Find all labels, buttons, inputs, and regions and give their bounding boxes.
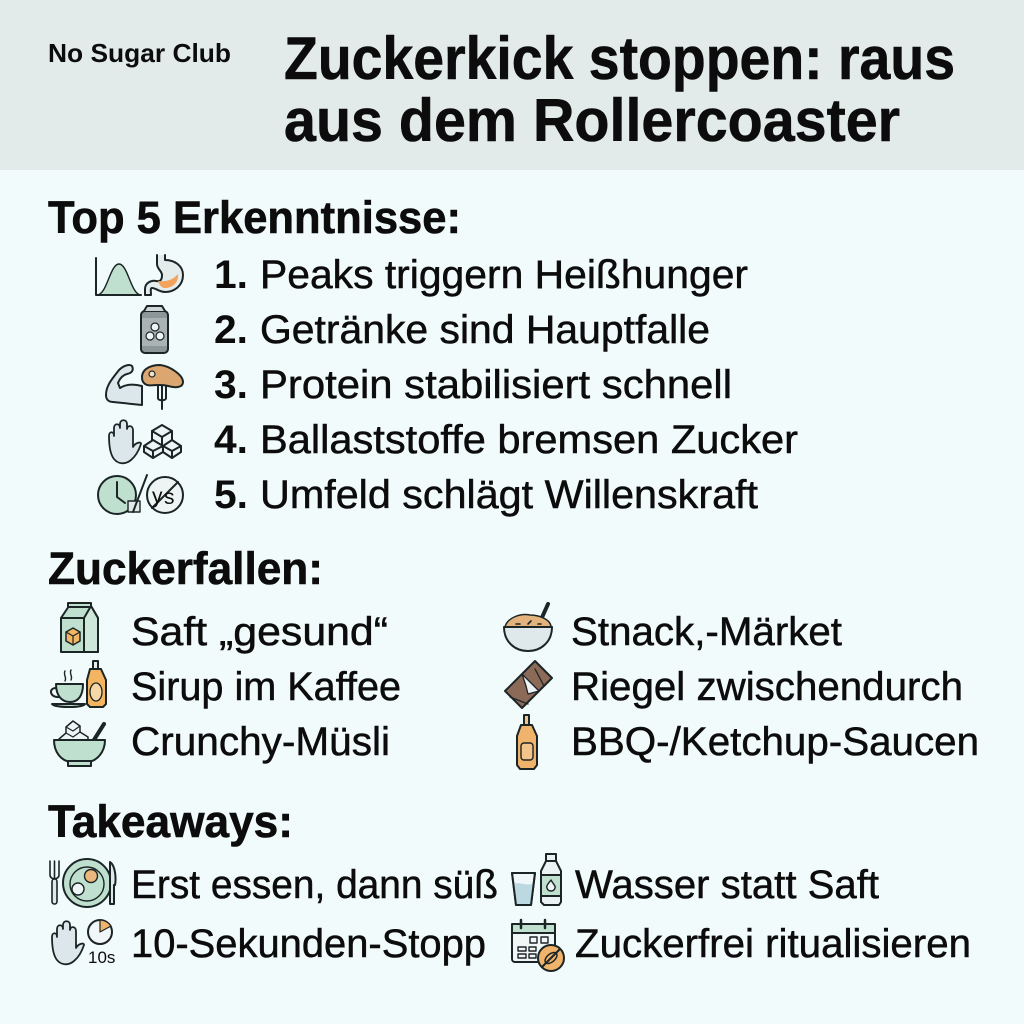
list: takeaways: Erst essen, dann süß xyxy=(131,863,498,907)
icon: flexed arm xyxy=(106,365,142,405)
list: insights: 2. xyxy=(214,308,248,352)
heading: Takeaways: Takeaways: xyxy=(48,796,293,847)
list: traps: Saft „gesund“ xyxy=(131,610,388,654)
icon: timer 10s xyxy=(88,920,115,967)
list: traps: Crunchy-Müsli xyxy=(131,720,390,764)
icon: crossed-out sweetener: s xyxy=(164,486,174,509)
icon: juice carton xyxy=(61,603,98,652)
icon: stomach xyxy=(145,255,183,295)
icon: water bottle xyxy=(541,854,561,905)
icon: plate with food xyxy=(63,859,111,907)
icon: timer 10s: 10s xyxy=(88,948,115,967)
icon: calendar xyxy=(512,920,555,962)
list: insights: Getränke sind Hauptfalle xyxy=(260,308,710,352)
list: traps xyxy=(131,610,979,764)
icon: clock xyxy=(98,476,140,514)
list: insights: 1. xyxy=(214,253,248,297)
icon: stop hand 10s xyxy=(52,921,84,964)
list: insights: Ballaststoffe bremsen Zucker xyxy=(260,418,798,462)
list: traps: Riegel zwischendurch xyxy=(571,665,963,709)
list: insights xyxy=(214,253,798,517)
icon: sauce bottle xyxy=(517,715,537,769)
icon: chocolate bar xyxy=(505,661,552,708)
icon: fork xyxy=(50,861,59,904)
icon: knife xyxy=(110,862,115,904)
heading: Zuckerfallen: Zuckerfallen: xyxy=(48,543,323,594)
title xyxy=(284,25,955,154)
list: insights: Peaks triggern Heißhunger xyxy=(260,253,748,297)
icon: sugar cubes xyxy=(144,425,181,458)
list: takeaways: Wasser statt Saft xyxy=(575,863,879,907)
list: insights: 3. xyxy=(214,363,248,407)
list: insights: Umfeld schlägt Willenskraft xyxy=(260,473,758,517)
title: Zuckerkick stoppen: raus xyxy=(284,25,955,92)
icon: cereal bowl with cubes xyxy=(54,721,105,766)
icon: bell curve xyxy=(96,258,141,295)
icon: crossed-out sweetener xyxy=(147,477,183,513)
icon: granola bowl xyxy=(504,604,552,651)
brand label: No Sugar Club xyxy=(48,38,231,68)
header band xyxy=(0,0,1024,170)
icon: no sugar badge xyxy=(538,945,564,971)
icon: drink can xyxy=(141,306,168,353)
list: traps: BBQ-/Ketchup-Saucen xyxy=(571,720,979,764)
icon: syrup bottle xyxy=(87,661,106,707)
list: insights: 5. xyxy=(214,473,248,517)
icon: crossed-out sweetener: y xyxy=(152,485,163,508)
list: traps: Sirup im Kaffee xyxy=(131,665,401,709)
icon: water glass xyxy=(512,873,535,905)
list: takeaways xyxy=(131,863,971,966)
icon: slash xyxy=(133,475,147,512)
list: takeaways: Zuckerfrei ritualisieren xyxy=(575,922,971,966)
list: traps: Stnack,-Märket xyxy=(571,610,842,654)
list: insights: Protein stabilisiert schnell xyxy=(260,363,732,407)
list: takeaways: 10-Sekunden-Stopp xyxy=(131,922,486,966)
icon: stop hand xyxy=(109,420,141,463)
list: insights: 4. xyxy=(214,418,248,462)
heading: Top 5: Top 5 Erkenntnisse: xyxy=(48,192,461,243)
title: aus dem Rollercoaster xyxy=(284,87,900,154)
icon: steak on fork xyxy=(142,365,183,409)
icon: coffee cup xyxy=(51,670,85,707)
